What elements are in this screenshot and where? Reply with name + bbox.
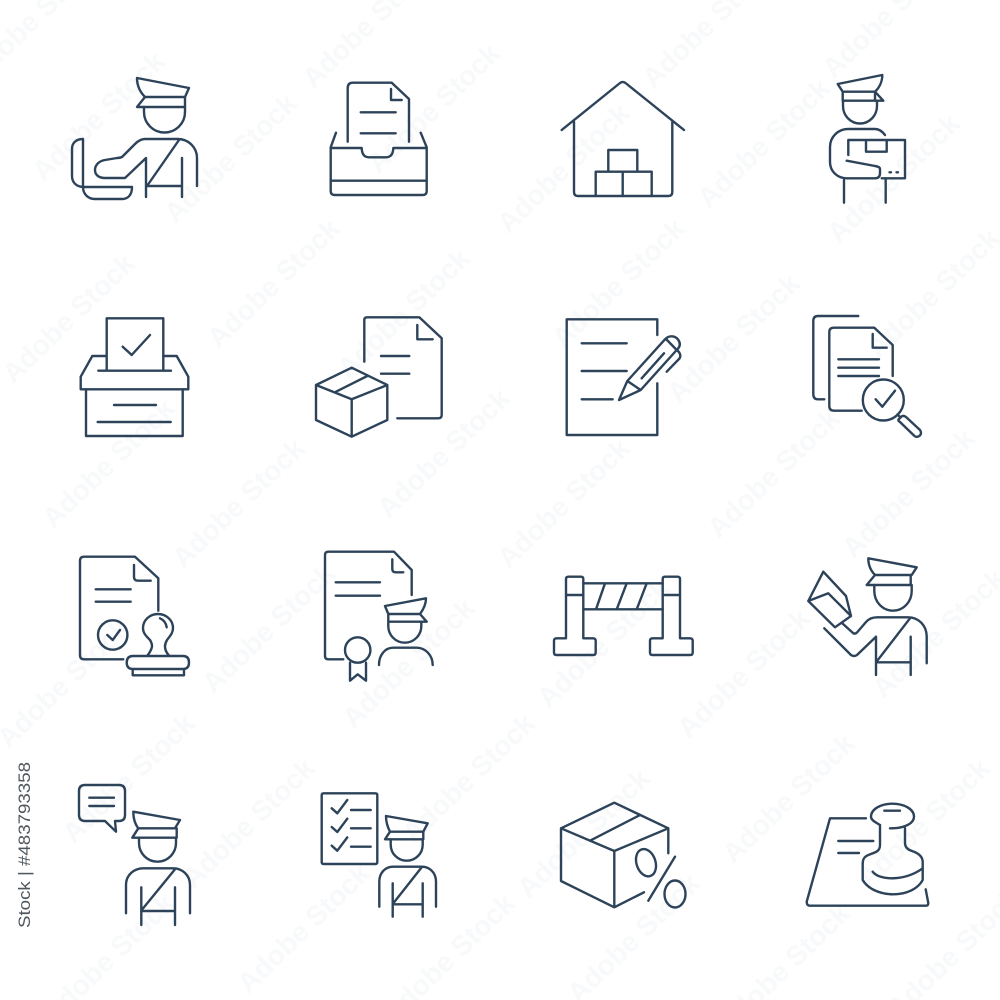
icon: officer holding parcel	[830, 75, 905, 203]
text: Adobe Stock	[26, 45, 171, 187]
checklist	[322, 793, 377, 864]
text: Adobe Stock	[361, 37, 506, 179]
text: Adobe Stock	[836, 422, 981, 564]
text: Adobe Stock	[371, 382, 516, 524]
text: Adobe Stock	[36, 392, 181, 534]
icon: approved document with stamp	[80, 557, 189, 675]
text: Adobe Stock	[821, 107, 966, 249]
percent sign	[633, 846, 686, 908]
box body	[86, 389, 183, 436]
front document	[829, 328, 893, 411]
icon: contract with pen	[567, 319, 680, 435]
check badge	[98, 620, 127, 650]
text: Adobe Stock	[336, 592, 481, 734]
text: Adobe Stock	[176, 752, 321, 894]
icon: document in tray	[331, 83, 427, 195]
text: Adobe Stock	[201, 212, 346, 354]
officer cap	[132, 812, 180, 838]
speech bubble	[79, 785, 125, 832]
icon: officer with speech bubble	[79, 785, 190, 925]
left post	[554, 577, 596, 655]
icon: certificate with officer	[325, 552, 433, 681]
icon: warehouse with boxes	[562, 82, 684, 196]
officer cap	[137, 78, 189, 107]
icon: officer holding envelope	[808, 558, 927, 675]
officer face	[139, 838, 176, 862]
paper sheet	[807, 818, 928, 906]
icon: customs officer at laptop	[72, 78, 197, 199]
watermark credit text: Stock | #483793358	[15, 762, 34, 928]
rubber stamp	[127, 614, 189, 675]
text: Adobe Stock	[231, 857, 376, 999]
text: Adobe Stock	[196, 557, 341, 699]
envelope	[808, 572, 851, 627]
document	[348, 83, 409, 142]
text: Adobe Stock	[701, 402, 846, 544]
icon: parcel with percent	[561, 803, 686, 908]
icon: officer with checklist	[322, 793, 436, 917]
parcel	[561, 803, 668, 907]
officer face	[144, 107, 185, 132]
rubber stamp	[863, 804, 923, 894]
parcel	[316, 368, 387, 437]
text: Adobe Stock	[491, 432, 636, 574]
icon: parcel and document	[316, 317, 442, 437]
right post	[650, 577, 693, 655]
tray	[331, 133, 427, 195]
back document	[813, 316, 858, 399]
officer body	[126, 868, 190, 925]
text: Adobe Stock	[691, 72, 836, 214]
stacked boxes	[596, 150, 652, 196]
officer cap	[838, 75, 883, 101]
text: Adobe Stock	[56, 707, 201, 849]
icon: documents under magnifier	[813, 316, 921, 437]
text: Adobe Stock	[511, 762, 656, 904]
officer body and arm	[95, 139, 197, 197]
box lid	[81, 356, 188, 389]
officer face	[391, 839, 423, 861]
document	[364, 317, 442, 418]
officer body	[379, 867, 436, 917]
icon: road barrier	[554, 577, 693, 655]
parcel	[848, 140, 905, 178]
seal ribbon	[345, 637, 370, 681]
text: Adobe Stock	[671, 602, 816, 744]
paper sheet	[567, 319, 657, 435]
officer body and arm	[824, 617, 927, 675]
text: Adobe Stock	[158, 87, 303, 229]
text: Adobe Stock	[331, 242, 476, 384]
text: Adobe Stock	[851, 752, 996, 894]
striped bar	[583, 583, 663, 609]
magnifier	[863, 380, 921, 437]
text: Adobe Stock	[716, 727, 861, 869]
text: Adobe Stock	[166, 432, 311, 574]
pencil	[619, 336, 680, 400]
officer body	[830, 129, 886, 203]
text: Adobe Stock	[491, 97, 636, 239]
text: Adobe Stock	[531, 572, 676, 714]
icon: ballot box with check	[81, 318, 188, 436]
text: Adobe Stock	[546, 212, 691, 354]
certificate	[325, 552, 412, 659]
officer face	[874, 585, 912, 611]
officer face	[843, 101, 877, 124]
text: Adobe Stock	[0, 247, 141, 389]
officer cap	[385, 816, 428, 839]
officer	[379, 598, 433, 665]
text: Adobe Stock	[661, 267, 806, 409]
text: Adobe Stock	[396, 707, 541, 849]
ballot paper	[107, 318, 163, 370]
icon: stamp on document	[807, 804, 928, 906]
officer cap	[867, 558, 917, 585]
house outline	[562, 82, 684, 196]
laptop	[72, 139, 132, 199]
document	[80, 557, 158, 659]
